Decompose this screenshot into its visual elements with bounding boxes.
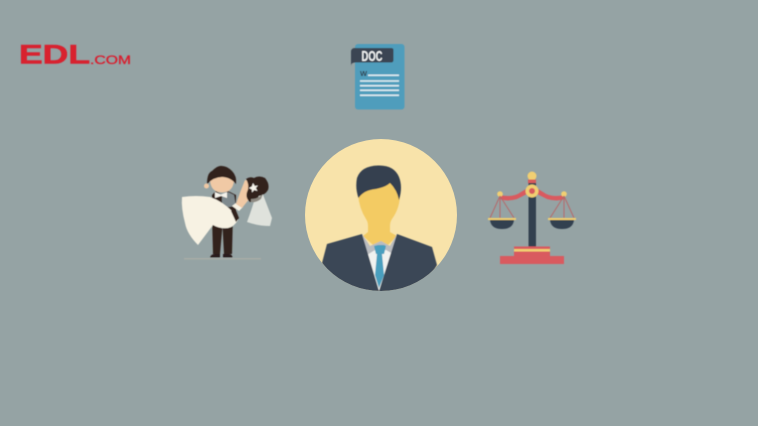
bride flower	[249, 183, 258, 192]
hair	[356, 165, 401, 200]
icon: scales of justice	[488, 172, 576, 264]
top finial	[528, 172, 536, 180]
bride dress	[182, 196, 238, 245]
groom legs	[212, 214, 233, 254]
bride sleeve trim	[231, 208, 239, 222]
bride hair shadow	[251, 194, 263, 202]
groom shoes	[210, 254, 232, 258]
logo: EDL.com: EDL	[19, 40, 90, 70]
stepped base	[500, 246, 564, 264]
logo: EDL.com: .COM	[90, 55, 131, 67]
DOC label banner: DOC	[362, 48, 383, 65]
bride glove	[232, 203, 243, 211]
groom vest and shoulder	[222, 192, 236, 208]
groom bow tie	[215, 192, 227, 198]
icon: bride and groom	[182, 166, 272, 260]
left pan	[488, 196, 516, 229]
central pillar	[528, 183, 536, 248]
groom torso	[212, 191, 236, 222]
suit jacket	[322, 234, 437, 292]
groom hair	[207, 166, 236, 184]
groom head	[210, 170, 234, 192]
bride arm and neck	[236, 180, 252, 208]
icon: DOC document	[351, 44, 404, 110]
tie	[374, 245, 386, 288]
veil	[247, 191, 272, 226]
pivot medallion	[526, 184, 538, 198]
logo: EDL.com	[19, 40, 131, 70]
ground shadow	[184, 258, 261, 260]
beam end knobs	[497, 191, 503, 197]
white shirt	[367, 250, 393, 291]
right pan	[548, 196, 576, 229]
scale beam	[499, 187, 565, 200]
document text lines: W	[360, 69, 368, 78]
shirt collar	[362, 234, 397, 254]
avatar circle	[305, 139, 457, 291]
bride hair	[246, 176, 269, 202]
face and neck	[358, 182, 400, 245]
icon: businessman avatar	[305, 139, 457, 292]
